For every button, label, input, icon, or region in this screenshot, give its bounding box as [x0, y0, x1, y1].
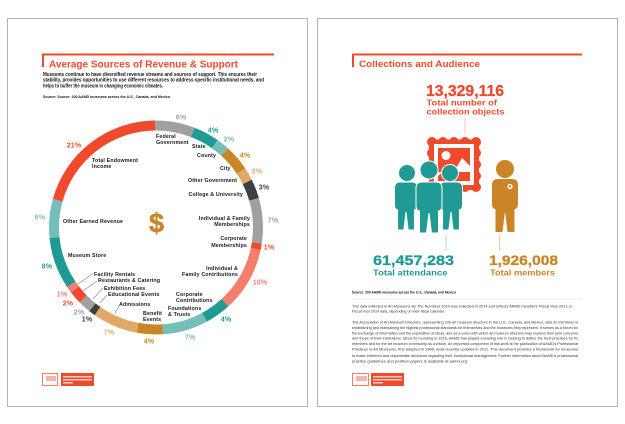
percentage labels: 7% — [185, 334, 196, 342]
stat: total attendance: 61,457,283 — [373, 252, 454, 268]
body text block: members and for the art museum community as a whole. An important component of this work is the publication of AAMD's Professional — [352, 342, 578, 346]
percentage labels: 2% — [74, 310, 85, 316]
percentage labels: 4% — [240, 152, 251, 160]
connector: members — [499, 235, 500, 251]
intro text block: Museums continue to have diversified revenue streams and sources of support. This ensures their — [43, 72, 257, 78]
percentage labels: 21% — [67, 142, 82, 150]
icon: stamp with picture — [427, 137, 481, 192]
category labels: City — [220, 166, 231, 172]
heading: revenue and support: Average Sources of Revenue & Support — [49, 58, 238, 70]
category labels: Individual & — [206, 266, 238, 272]
body text block: The Association of Art Museum Directors, representing 239 art museum directors in the U.S., Canada, and Mexico, aids its members in — [352, 320, 578, 324]
percentage labels: 6% — [176, 114, 187, 122]
category labels: Total Endowment — [92, 158, 138, 164]
source note: Source: 200 AAMD museums across the U.S., Canada, and Mexico — [352, 290, 457, 294]
category labels: Memberships — [211, 243, 247, 249]
category labels: Benefit — [143, 311, 162, 317]
category labels: Contributions — [176, 298, 213, 304]
icon: audience group — [395, 161, 462, 233]
category labels: Memberships — [214, 222, 250, 228]
category labels: Other Government — [188, 178, 237, 184]
body text block: practice guidelines and position papers is available at aamd.org. — [352, 360, 468, 364]
category labels: Admissions — [119, 302, 151, 308]
panel: revenue page — [8, 18, 308, 406]
category labels: Individual & Family — [199, 216, 250, 222]
icon: member figure — [492, 160, 518, 232]
body text block: establishing and maintaining the highest professional standards for themselves and the museums they represent. It serves as a forum for — [352, 326, 579, 330]
body text block: Fiscal Year 2014 data, depending on their fiscal calendar. — [352, 310, 445, 314]
category labels: Other Earned Revenue — [63, 219, 123, 225]
intro text block — [43, 72, 264, 90]
connector: attendance — [446, 235, 447, 251]
stat: collection objects: 13,329,116 — [426, 83, 504, 100]
percentage labels: 6% — [35, 214, 46, 222]
category labels: Events — [143, 317, 161, 323]
source note: Source: Source: 200 AAMD museums across the U.S., Canada, and Mexico — [43, 95, 171, 99]
heading: revenue and support — [43, 54, 274, 70]
connector: collection — [464, 118, 466, 134]
body text block: and those of their institutions. Since its founding in 1916, AAMD has played a leading role in helping to define the best practices for its — [352, 336, 578, 340]
percentage labels: 3% — [259, 184, 270, 192]
category labels: Corporate — [220, 236, 247, 242]
percentage labels: 2% — [252, 168, 263, 176]
percentage labels: 8% — [42, 264, 53, 270]
heading: collections and audience: Collections and Audience — [359, 59, 480, 69]
category labels: Museum Store — [68, 253, 106, 259]
category labels: State — [192, 144, 206, 150]
stat: collection objects: collection objects — [426, 106, 505, 116]
percentage labels: 4% — [144, 338, 155, 346]
category labels: Federal — [156, 134, 176, 140]
stat: collection objects — [426, 83, 505, 116]
logo: left page — [42, 373, 94, 386]
category labels: Educational Events — [108, 292, 160, 298]
stat: total attendance: Total attendance — [373, 268, 448, 278]
category labels: County — [197, 153, 216, 159]
stat: total members — [489, 252, 558, 278]
percentage labels: 4% — [208, 128, 219, 134]
percentage labels: 1% — [264, 244, 275, 252]
intro text block: helps to buffer the museum in changing economic climates. — [43, 84, 164, 90]
category labels: & Trusts — [168, 312, 190, 318]
body text block: The data reflected in Art Museums By The Numbers 2014 was collected in 2014 and reflects AAMD members' Fiscal Year 2013 or — [352, 304, 573, 308]
body text block: to make informed and responsible decisions regarding their institutional management. Further information about AAMD's professional — [352, 354, 578, 358]
category labels: College & University — [188, 192, 243, 198]
percentage labels: 1% — [57, 292, 68, 298]
logo: right page — [352, 373, 404, 386]
percentage labels: 10% — [253, 280, 268, 286]
stat: total members: Total members — [490, 268, 556, 278]
percentage labels: 7% — [268, 218, 279, 224]
percentage labels: 1% — [82, 316, 93, 324]
stat: total members: 1,926,008 — [489, 252, 558, 268]
donut chart: revenue sources — [54, 126, 258, 330]
percentage labels: 2% — [224, 136, 235, 144]
intro text block: stability, provides opportunities to use different resources to address specific institutional needs, and — [43, 78, 264, 84]
stat: total attendance — [373, 252, 454, 278]
percentage labels — [35, 114, 279, 346]
leader lines — [78, 274, 119, 313]
body text block — [352, 304, 579, 364]
icon: dollar sign: $ — [149, 208, 164, 238]
category labels: Family Contributions — [182, 272, 238, 278]
category labels: Income — [92, 164, 111, 170]
category labels: Government — [156, 140, 189, 146]
category labels: Restaurants & Catering — [98, 278, 160, 284]
category labels: Foundations — [168, 306, 201, 312]
category labels: Facility Rentals — [94, 272, 135, 278]
heading: collections and audience — [353, 54, 582, 69]
category labels: Exhibition Fees — [104, 286, 145, 292]
percentage labels: 4% — [221, 316, 232, 324]
panel: collections page — [318, 18, 618, 406]
percentage labels: 2% — [63, 300, 74, 308]
percentage labels: 7% — [104, 330, 115, 336]
stat: collection objects: Total number of — [426, 98, 497, 108]
category labels: Corporate — [176, 292, 203, 298]
body text block: Practices in Art Museums, first adopted in 1966, most recently updated in 2011. This document provides a framework for museums — [352, 348, 578, 352]
category labels — [63, 134, 250, 323]
body text block: the exchange of information and the exploration of ideas, and as a voice with which art museum directors may express their joint concerns — [352, 332, 578, 336]
